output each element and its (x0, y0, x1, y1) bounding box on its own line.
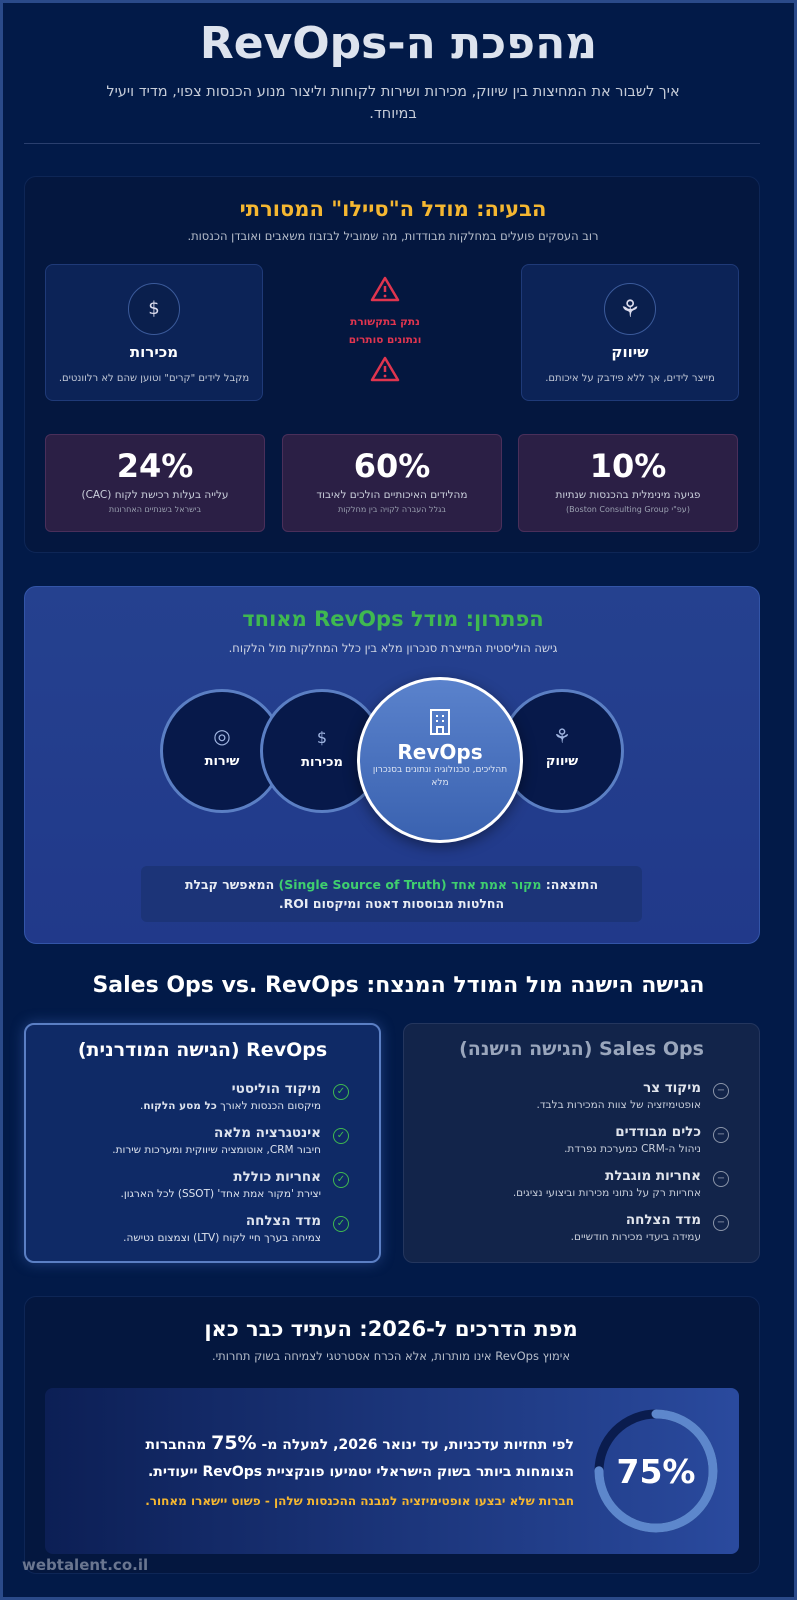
stat: 24%: בישראל בשנתיים האחרונות (109, 505, 201, 514)
item (513, 1168, 729, 1199)
forecast text: לפי תחזיות עדכניות, עד ינואר 2026, למעלה מ- 75% מהחברות הצומחות ביותר בשוק הישראלי יטמיעו פונקציית RevOps ייעודית. (146, 1432, 574, 1480)
icon: dollar (128, 283, 180, 335)
stat: 24%: 24% (117, 447, 193, 485)
card: marketing (521, 264, 739, 401)
stat: 10% (518, 434, 738, 532)
icon: dollar: $ (148, 298, 160, 319)
circle: marketing (500, 689, 624, 813)
item: אחריות מוגבלת (605, 1168, 701, 1184)
item: − (717, 1129, 725, 1140)
heading: roadmap: מפת הדרכים ל-2026: העתיד כבר כאן (204, 1317, 578, 1341)
circle: service (160, 689, 284, 813)
footer: brand: webtalent.co.il (22, 1556, 148, 1574)
circle: service: שירות (205, 754, 239, 769)
circle: service: ◎ (213, 724, 231, 748)
icon: building (430, 709, 450, 735)
item: מיקסום הכנסות לאורך כל מסע הלקוח. (140, 1100, 321, 1112)
icon: brain (604, 283, 656, 335)
donut chart: 75% (594, 1410, 718, 1532)
item (140, 1081, 349, 1112)
panel: problem (24, 176, 760, 553)
stat: 60%: 60% (354, 447, 430, 485)
item (121, 1169, 349, 1200)
item: מיקוד צר (643, 1080, 701, 1096)
panel: solution (24, 586, 760, 944)
item (536, 1080, 729, 1111)
item: עמידה ביעדי מכירות חודשיים. (571, 1231, 701, 1243)
card: sales: מקבל לידים "קרים" וטוען שהם לא רלוונטים. (59, 373, 249, 384)
circle: marketing: שיווק (546, 754, 578, 769)
item (571, 1212, 729, 1243)
panel: RevOps modern: RevOps (הגישה המודרנית) (78, 1039, 327, 1061)
icon: brain: ⚘ (619, 295, 641, 323)
callout: result: התוצאה: מקור אמת אחד (Single Source of Truth) המאפשר קבלת (185, 877, 598, 892)
warning: disconnect: נתק בתקשורת (350, 316, 420, 328)
circle: RevOps center: RevOps (397, 740, 483, 764)
item: אינטגרציה מלאה (214, 1125, 321, 1141)
problem subtitle: רוב העסקים פועלים במחלקות מבודדות, מה שמוביל לבזבוז משאבים ואובדן הכנסות. (187, 229, 599, 243)
warning text: חברות שלא יבצעו אופטימיזציה למבנה ההכנסות שלהן - פשוט יישארו מאחור. (145, 1494, 574, 1508)
item: − (717, 1217, 725, 1228)
heading: problem: הבעיה: מודל ה"סיילו" המסורתי (240, 197, 546, 221)
panel: RevOps modern (24, 1023, 381, 1263)
stat: 10%: (עפ"י Boston Consulting Group) (566, 505, 690, 514)
stat: 24% (45, 434, 265, 532)
item: − (717, 1173, 725, 1184)
item: כלים מבודדים (615, 1124, 701, 1140)
item: חיבור CRM, אוטומציה שיווקית ומערכות שירות. (112, 1144, 321, 1156)
circle: RevOps center (357, 677, 523, 843)
item: צמיחה בערך חיי לקוח (LTV) וצמצום נטישה. (123, 1232, 321, 1244)
item: אופטימיזציה של צוות המכירות בלבד. (536, 1099, 701, 1111)
item: יצירת 'מקור אמת אחד' (SSOT) לכל הארגון. (121, 1188, 321, 1200)
item: מדד הצלחה (626, 1212, 701, 1228)
donut chart: 75%: 75% (616, 1452, 696, 1491)
circle: RevOps center: תהליכים, טכנולוגיה ונתונים בסנכרון מלא (373, 765, 507, 788)
item (112, 1125, 349, 1156)
circle: sales: $ (317, 728, 327, 747)
item: ✓ (337, 1086, 345, 1097)
panel: Sales Ops old: Sales Ops (הגישה הישנה) (459, 1038, 704, 1060)
heading: solution: הפתרון: מודל RevOps מאוחד (242, 607, 544, 631)
circle: marketing: ⚘ (553, 724, 571, 748)
heading: comparison: הגישה הישנה מול המודל המנצח: Sales Ops vs. RevOps (92, 973, 705, 998)
circle: sales (260, 689, 384, 813)
roadmap subtitle: אימוץ RevOps אינו מותרות, אלא הכרח אסטרטגי לצמיחה בשוק תחרותי. (212, 1349, 570, 1363)
title: מהפכת ה-RevOps (200, 18, 597, 69)
panel: Sales Ops old (403, 1023, 760, 1263)
solution subtitle: גישה הוליסטית המייצרת סנכרון מלא בין כלל המחלקות מול הלקוח. (229, 641, 557, 655)
card: marketing: מייצר לידים, אך ללא פידבק על איכותם. (545, 373, 715, 384)
stat: 10%: 10% (590, 447, 666, 485)
circle: sales: מכירות (301, 755, 343, 770)
forecast box (45, 1388, 739, 1554)
stat: 60% (282, 434, 502, 532)
item: מדד הצלחה (246, 1213, 321, 1229)
stat: 24%: עלייה בעלות רכישת לקוח (CAC) (81, 489, 228, 501)
card: marketing: שיווק (611, 343, 649, 361)
card: sales: מכירות (130, 343, 178, 361)
panel: roadmap 2026 (24, 1296, 760, 1574)
card: sales (45, 264, 263, 401)
item: מיקוד הוליסטי (232, 1081, 321, 1097)
callout: result: החלטות מבוססות דאטה ומיקסום ROI. (279, 896, 504, 911)
item: ✓ (337, 1218, 345, 1229)
stat: 60%: מהלידים האיכותיים הולכים לאיבוד (316, 489, 468, 501)
item: ✓ (337, 1174, 345, 1185)
item: אחריות כוללת (233, 1169, 321, 1185)
item: אחריות רק על נתוני מכירות וביצועי נציגים. (513, 1187, 701, 1199)
item: ניהול ה-CRM כמערכת נפרדת. (564, 1143, 701, 1155)
item (564, 1124, 729, 1155)
item: − (717, 1085, 725, 1096)
warning: disconnect (349, 276, 421, 382)
item: ✓ (337, 1130, 345, 1141)
warning: disconnect: ונתונים סותרים (349, 334, 421, 346)
subtitle: איך לשבור את המחיצות בין שיווק, מכירות ושירות לקוחות וליצור מנוע הכנסות צפוי, מדיד ויעיל במיוחד. (106, 84, 680, 122)
stat: 60%: בגלל העברה לקויה בין מחלקות (338, 505, 446, 514)
callout: result (141, 866, 642, 922)
stat: 10%: פגיעה מינימלית בהכנסות שנתיות (556, 489, 700, 501)
item (123, 1213, 349, 1244)
